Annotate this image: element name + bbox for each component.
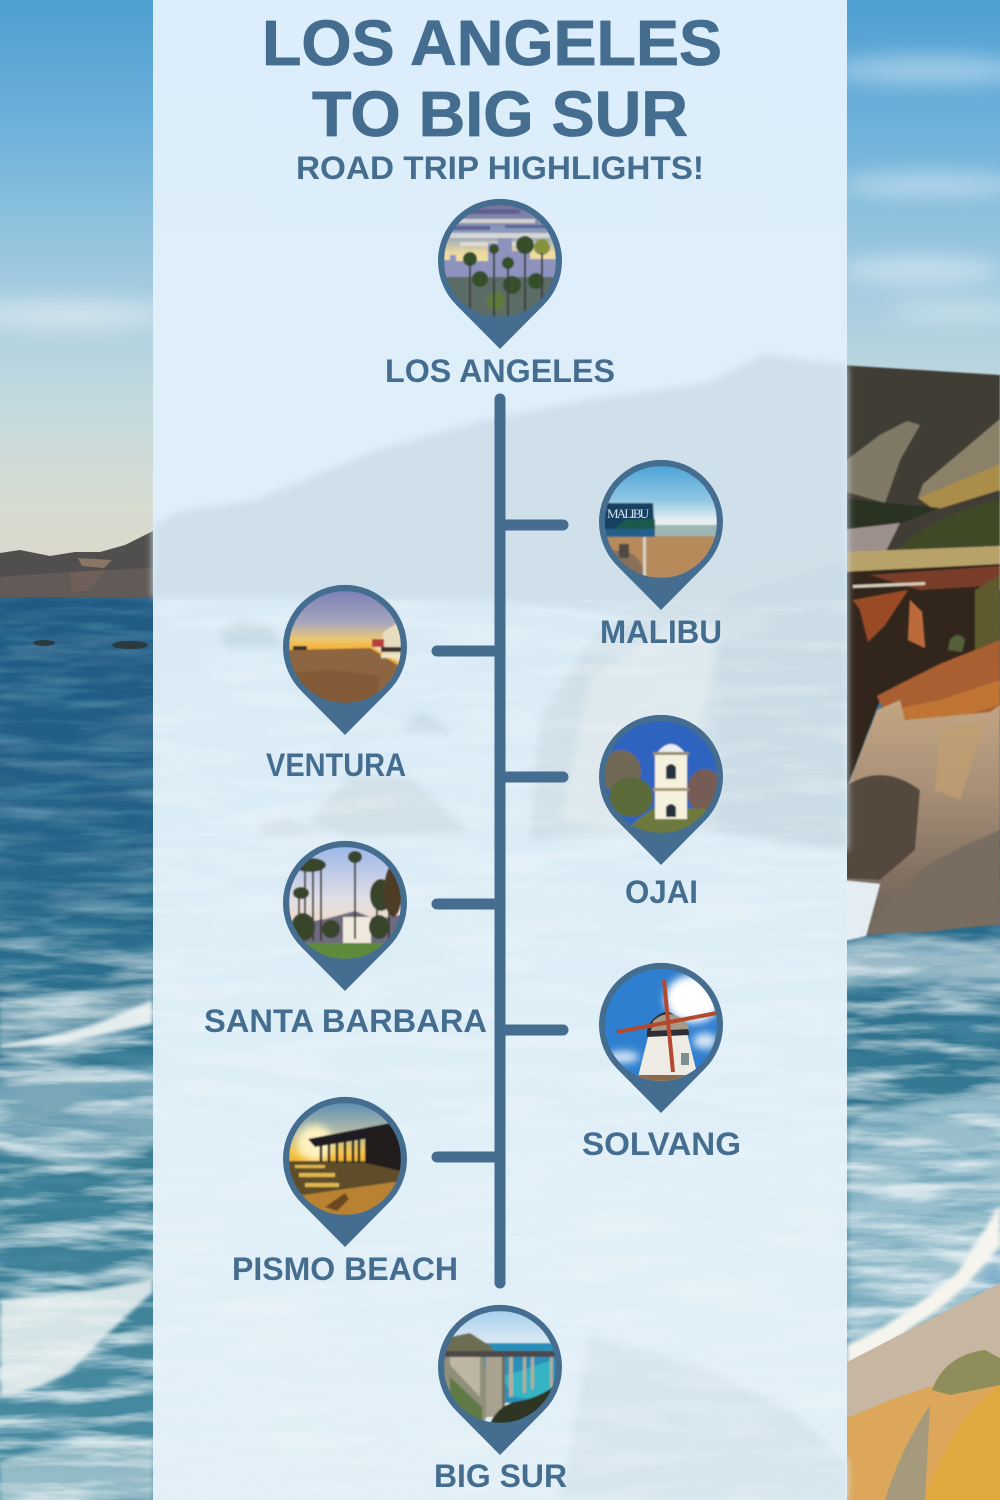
label: Malibu: MALIBU <box>600 614 722 650</box>
pin: Big Sur <box>438 1305 562 1455</box>
label: Pismo Beach: PISMO BEACH <box>232 1251 458 1287</box>
label: Ojai: OJAI <box>625 874 698 910</box>
bottom right beach and rocks <box>847 1283 1000 1500</box>
timeline spine and branches <box>437 399 563 1283</box>
label: Big Sur: BIG SUR <box>434 1458 567 1494</box>
subtitle: ROAD TRIP HIGHLIGHTS! <box>296 150 704 186</box>
title: LOS ANGELES <box>262 7 722 79</box>
left sea foam waves <box>0 985 153 1500</box>
broad foam fields <box>0 939 1000 1370</box>
pin: Pismo Beach <box>283 1097 407 1247</box>
pin: Ventura <box>283 585 407 735</box>
pin: Santa Barbara <box>283 841 407 991</box>
label: Los Angeles: LOS ANGELES <box>385 353 615 389</box>
label: Ventura: VENTURA <box>266 747 406 783</box>
pin: Solvang <box>599 963 723 1113</box>
right hills and cliffs <box>840 365 1000 785</box>
pin: Malibu <box>599 460 723 610</box>
title: TO BIG SUR <box>312 78 688 150</box>
pin: Los Angeles <box>438 199 562 349</box>
pin: Malibu: MALIBU <box>607 506 650 521</box>
left headland <box>0 531 153 597</box>
title <box>262 7 722 150</box>
label: Solvang: SOLVANG <box>582 1126 741 1162</box>
translucent centre panel <box>153 0 847 1500</box>
label: Santa Barbara: SANTA BARBARA <box>204 1003 487 1039</box>
pin: Ojai <box>599 715 723 865</box>
